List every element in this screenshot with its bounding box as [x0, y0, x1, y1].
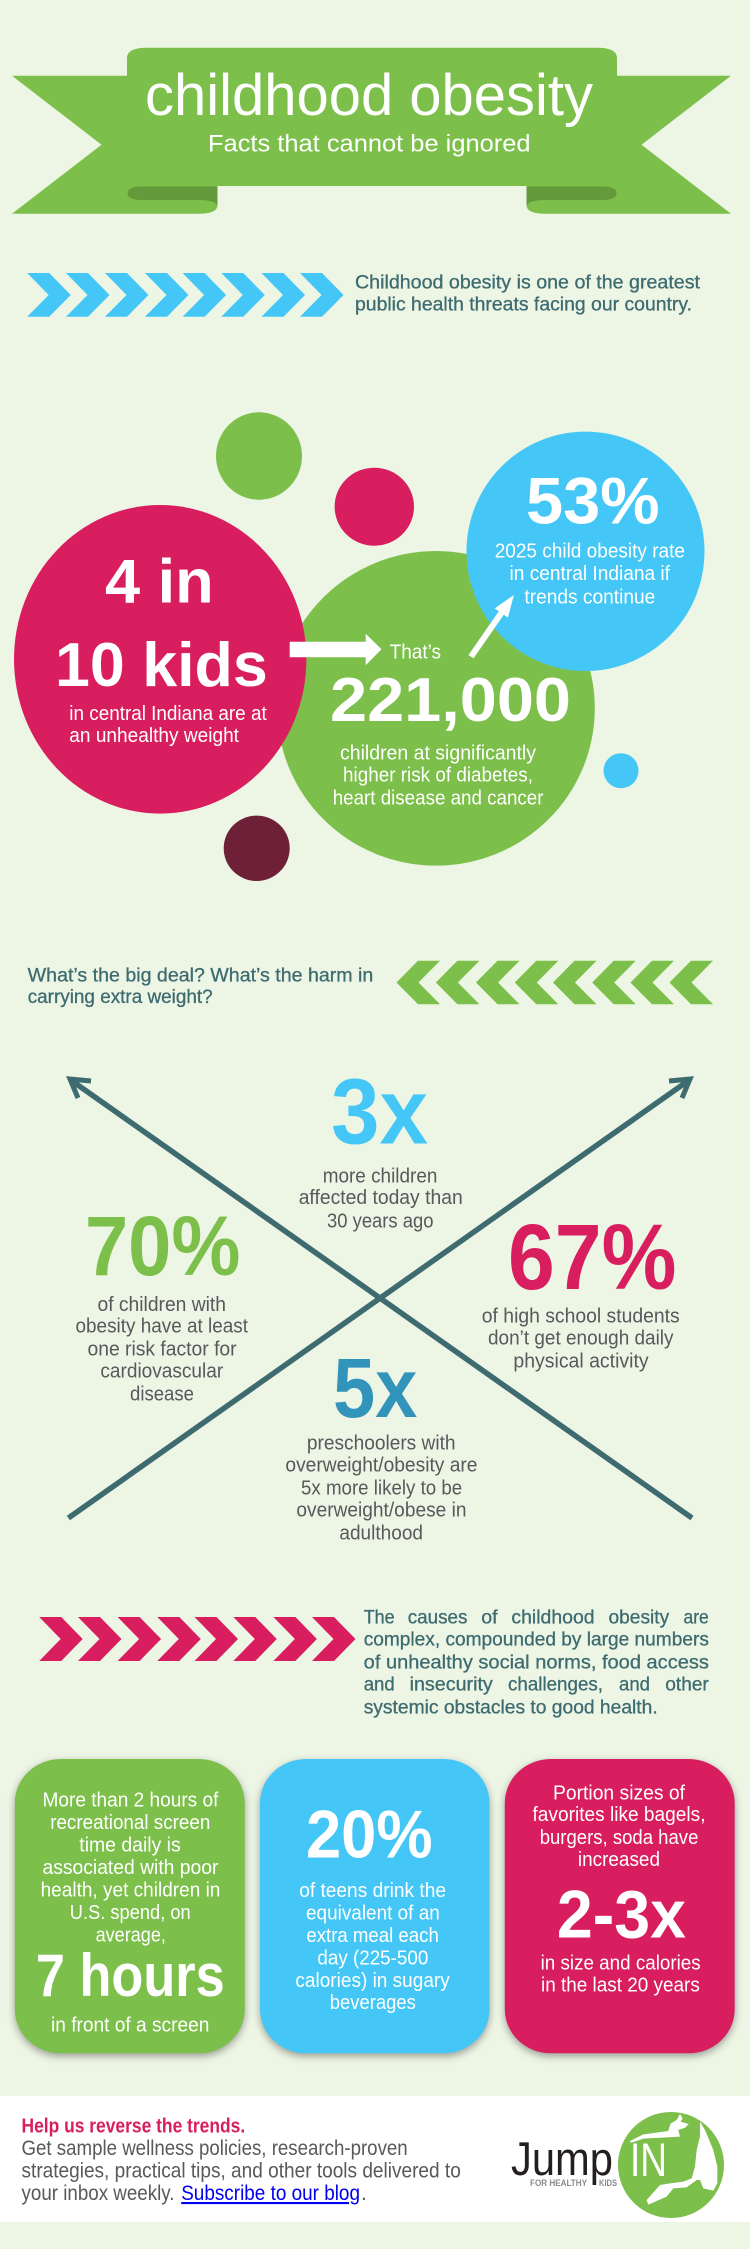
caption: 70%: obesity have at least	[76, 1316, 248, 1338]
causes paragraph: insecurity	[410, 1674, 493, 1696]
causes paragraph: are	[684, 1606, 709, 1628]
card text: portion sizes: Portion sizes of	[553, 1782, 685, 1804]
card text: portion sizes: increased	[578, 1849, 660, 1871]
footer text: your inbox weekly.	[22, 2182, 174, 2205]
caption: 70%: of children with	[98, 1294, 226, 1316]
caption: 5x	[285, 1433, 478, 1544]
card text: screen time: time daily is	[79, 1835, 181, 1857]
logo: Jump IN for healthy kids: IN	[630, 2133, 667, 2186]
logo: Jump IN for healthy kids: FOR HEALTHY	[530, 2178, 588, 2189]
arrow: horizontal to That's	[290, 634, 382, 665]
caption: 67%: of high school students	[482, 1306, 680, 1328]
card text: sugary beverages	[295, 1880, 450, 2014]
caption: 221,000: higher risk of diabetes,	[343, 765, 533, 787]
arrow: diagonal to 53%	[468, 595, 514, 658]
subtitle: Facts that cannot be ignored	[208, 131, 531, 158]
causes paragraph: obesity	[608, 1606, 669, 1628]
caption: size and calories	[541, 1952, 701, 1996]
panel: 53% blue circle	[466, 432, 704, 671]
causes paragraph: challenges,	[508, 1674, 603, 1696]
panel: footer band	[0, 2096, 750, 2222]
panel: screen time card	[15, 1759, 245, 2053]
logo: Jump IN for healthy kids: KIDS	[599, 2178, 617, 2189]
logo: Jump IN for healthy kids	[511, 2112, 724, 2218]
logo: Jump IN for healthy kids: Jump	[511, 2132, 613, 2185]
icon: green chevrons	[396, 961, 713, 1004]
causes paragraph: and	[619, 1674, 650, 1696]
causes paragraph: systemic obstacles to good health.	[364, 1696, 658, 1718]
causes paragraph	[364, 1606, 709, 1718]
stat: 221,000: 221,000	[330, 666, 571, 735]
caption: 67%	[482, 1306, 680, 1372]
footer text: strategies, practical tips, and other tools delivered to	[22, 2160, 461, 2183]
card text: sugary beverages: equivalent of an	[306, 1902, 440, 1924]
card text: screen time: associated with poor	[42, 1857, 219, 1879]
card text: sugary beverages: extra meal each	[306, 1925, 439, 1947]
caption: in central Indiana are at	[69, 703, 267, 725]
causes paragraph: complex, compounded by large numbers	[364, 1628, 709, 1650]
title text: childhood obesity	[145, 63, 593, 128]
intro statement: public health threats facing our country.	[355, 294, 692, 316]
caption: 2025 child obesity rate	[495, 541, 685, 563]
stat: 4 in 10 kids: 4 in	[105, 548, 214, 617]
stat: 3x	[299, 1060, 463, 1232]
card text: portion sizes: burgers, soda have	[540, 1827, 698, 1849]
caption: 5x: adulthood	[339, 1522, 423, 1544]
panel: 221,000 green circle	[277, 551, 595, 866]
card text: portion sizes: favorites like bagels,	[532, 1804, 706, 1826]
causes paragraph: and	[364, 1674, 395, 1696]
caption: 221,000: heart disease and cancer	[333, 787, 544, 809]
card text: screen time: U.S. spend, on	[70, 1902, 191, 1924]
intro statement: Childhood obesity is one of the greatest	[355, 271, 701, 293]
stat: 4 in 10 kids: 10 kids	[55, 631, 268, 700]
caption: 70%: cardiovascular	[100, 1361, 224, 1383]
label: That's: That’s	[390, 641, 441, 663]
stat: 20%: 20%	[306, 1797, 433, 1873]
question heading: carrying extra weight?	[28, 986, 213, 1008]
stat: 70%	[76, 1199, 248, 1406]
icon: pink chevrons	[39, 1617, 355, 1661]
stat: 5x	[285, 1341, 478, 1544]
caption: 3x: more children	[323, 1165, 437, 1187]
stat: 4 in 10 kids	[55, 548, 268, 700]
footer text: Get sample wellness policies, research-proven	[22, 2137, 408, 2160]
caption: 67%: physical activity	[513, 1350, 649, 1372]
caption: trends continue	[524, 586, 655, 608]
card text: screen time	[41, 1790, 220, 1947]
title banner	[12, 48, 731, 214]
stat: 3x: 3x	[331, 1060, 428, 1164]
intro statement	[355, 271, 701, 316]
stat: 67%	[482, 1205, 680, 1372]
stat: 5x: 5x	[333, 1341, 418, 1435]
card text: sugary beverages: day (225-500	[317, 1947, 428, 1969]
caption: 3x: 30 years ago	[327, 1210, 434, 1232]
panel: portion sizes card	[505, 1759, 735, 2053]
caption	[69, 703, 267, 747]
caption: 3x	[299, 1165, 463, 1232]
caption: 67%: don’t get enough daily	[488, 1327, 674, 1349]
card text: sugary beverages: of teens drink the	[299, 1880, 446, 1902]
caption: 5x: preschoolers with	[307, 1433, 456, 1455]
stat: 7 hours: 7 hours	[36, 1942, 225, 2009]
causes paragraph: childhood	[511, 1606, 595, 1628]
card text: portion sizes	[532, 1782, 706, 1871]
caption: 221,000: children at significantly	[340, 742, 536, 764]
panel: sugary beverages card	[260, 1759, 490, 2053]
causes paragraph: The	[364, 1606, 395, 1628]
panel: 4 in 10 kids pink circle	[14, 505, 306, 814]
card text: screen time: More than 2 hours of	[42, 1790, 219, 1812]
causes paragraph: of unhealthy social norms, food access	[364, 1651, 709, 1673]
footer text	[22, 2137, 461, 2205]
footer heading: Help us reverse the trends.	[22, 2116, 245, 2138]
causes paragraph: causes	[408, 1606, 468, 1628]
caption: 5x: overweight/obese in	[296, 1499, 466, 1521]
question heading	[28, 964, 373, 1008]
caption: 70%	[76, 1294, 248, 1406]
caption: 221,000	[333, 742, 544, 809]
arrows: crossing X	[68, 1079, 692, 1518]
card text: screen time: health, yet children in	[41, 1880, 220, 1902]
card text: sugary beverages: calories) in sugary	[295, 1970, 450, 1992]
caption: size and calories: in the last 20 years	[541, 1974, 700, 1996]
stat: 2-3x: 2-3x	[557, 1877, 686, 1953]
stat: 70%: 70%	[85, 1199, 240, 1293]
caption: 5x: 5x more likely to be	[301, 1477, 462, 1499]
footer text: .	[361, 2182, 367, 2205]
caption: in front of a screen: in front of a screen	[51, 2014, 209, 2036]
caption: 3x: affected today than	[299, 1187, 463, 1209]
logo silhouette	[629, 2114, 717, 2205]
question heading: What’s the big deal? What’s the harm in	[28, 964, 373, 986]
causes paragraph: other	[665, 1674, 709, 1696]
icon: blue chevrons	[27, 273, 343, 317]
card text: screen time: average,	[96, 1925, 166, 1947]
stat: 67%: 67%	[508, 1205, 676, 1309]
caption	[495, 541, 685, 608]
caption: 70%: disease	[130, 1384, 194, 1406]
caption: in central Indiana if	[510, 563, 670, 585]
decorative circles group	[216, 412, 638, 881]
caption: 5x: overweight/obesity are	[285, 1454, 478, 1476]
caption: 70%: one risk factor for	[88, 1338, 237, 1360]
footer text: Subscribe to our blog	[181, 2182, 360, 2205]
caption: size and calories: in size and calories	[541, 1952, 701, 1974]
card text: sugary beverages: beverages	[330, 1992, 416, 2014]
card text: screen time: recreational screen	[50, 1812, 210, 1834]
stat: 53%: 53%	[526, 463, 660, 537]
causes paragraph: of	[481, 1606, 498, 1628]
caption: an unhealthy weight	[69, 725, 239, 747]
